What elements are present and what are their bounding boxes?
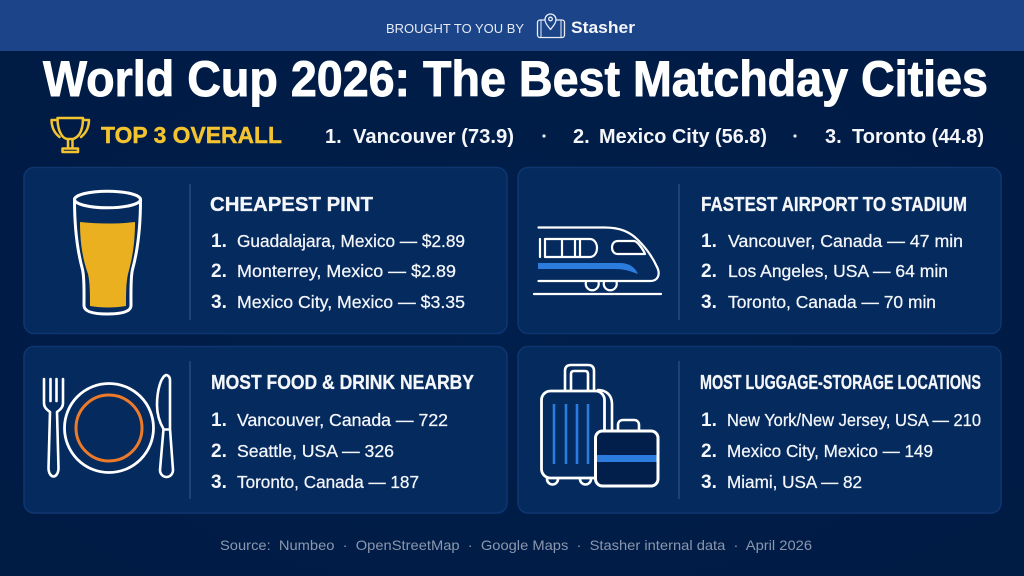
list: Mexico City, Mexico — $3.35 bbox=[237, 292, 465, 312]
panel: fastest airport to stadium bbox=[518, 168, 1001, 334]
icon: Stasher logo bbox=[538, 14, 564, 38]
list: 1. bbox=[701, 410, 717, 431]
list: 1. bbox=[211, 410, 227, 431]
rank 1: Vancouver (73.9) bbox=[353, 126, 514, 148]
list: Monterrey, Mexico — $2.89 bbox=[237, 261, 456, 281]
top 3 label: TOP 3 OVERALL bbox=[101, 122, 282, 148]
list: Toronto, Canada — 70 min bbox=[728, 292, 936, 312]
top 3 overall row bbox=[52, 118, 984, 152]
rank 3: 3. bbox=[825, 126, 842, 148]
list: 2. bbox=[211, 261, 227, 282]
list: Los Angeles, USA — 64 min bbox=[728, 261, 948, 281]
list: 3. bbox=[701, 472, 717, 493]
list: Seattle, USA — 326 bbox=[237, 441, 394, 461]
list: Guadalajara, Mexico — $2.89 bbox=[237, 231, 465, 251]
heading: CHEAPEST PINT bbox=[210, 194, 373, 216]
heading: FASTEST AIRPORT TO STADIUM bbox=[701, 194, 967, 216]
list: 3. bbox=[701, 292, 717, 313]
rank 2: 2. bbox=[573, 126, 590, 148]
list bbox=[211, 231, 465, 313]
list: Mexico City, Mexico — 149 bbox=[727, 441, 933, 461]
list: Miami, USA — 82 bbox=[727, 472, 862, 492]
icon: luggage bbox=[542, 365, 658, 486]
list: New York/New Jersey, USA — 210 bbox=[727, 410, 981, 430]
list: 3. bbox=[211, 472, 227, 493]
list bbox=[701, 231, 963, 313]
icon: plate and cutlery bbox=[44, 375, 173, 477]
icon: trophy bbox=[52, 118, 89, 152]
brand name: Stasher bbox=[571, 18, 635, 37]
list: 1. bbox=[211, 231, 227, 252]
sponsor label: BROUGHT TO YOU BY bbox=[386, 21, 524, 36]
list: Vancouver, Canada — 47 min bbox=[728, 231, 963, 251]
header banner bbox=[0, 0, 1024, 51]
list: Toronto, Canada — 187 bbox=[237, 472, 419, 492]
panel: most luggage-storage locations bbox=[518, 346, 1001, 513]
icon: beer glass bbox=[74, 191, 140, 314]
list: 2. bbox=[701, 261, 717, 282]
rank 2: Mexico City (56.8) bbox=[599, 126, 767, 148]
rank 3: Toronto (44.8) bbox=[852, 126, 984, 148]
list: 3. bbox=[211, 292, 227, 313]
heading: MOST FOOD & DRINK NEARBY bbox=[211, 372, 475, 394]
list: 2. bbox=[701, 441, 717, 462]
panel: cheapest pint bbox=[24, 168, 507, 334]
panel: most food and drink nearby bbox=[24, 346, 507, 513]
list bbox=[701, 410, 981, 493]
list bbox=[211, 410, 448, 493]
list: 2. bbox=[211, 441, 227, 462]
rank 1: 1. bbox=[325, 126, 342, 148]
list: Vancouver, Canada — 722 bbox=[237, 410, 448, 430]
source footer: Source: Numbeo · OpenStreetMap · Google Maps · Stasher internal data · April 2026 bbox=[220, 537, 812, 553]
list: 1. bbox=[701, 231, 717, 252]
icon: train bbox=[534, 228, 661, 294]
